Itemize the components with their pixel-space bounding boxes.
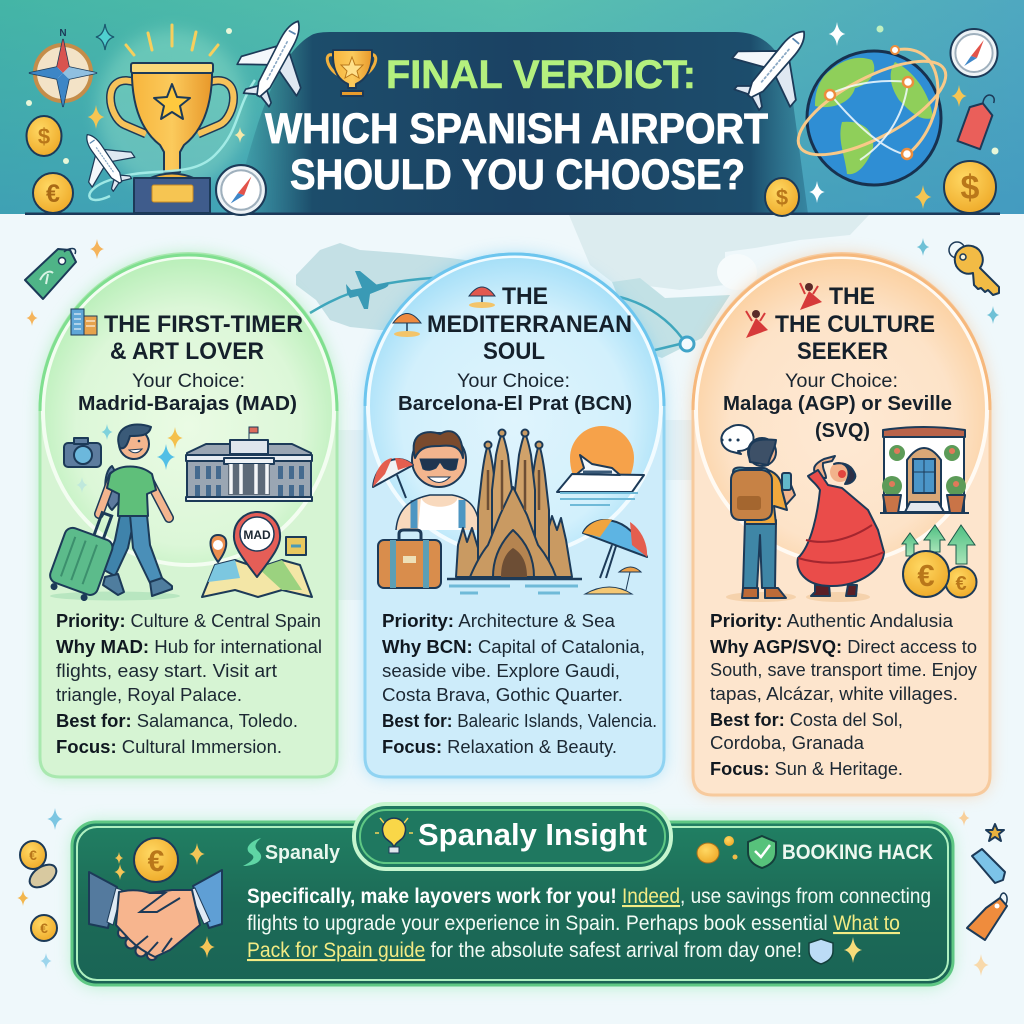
- airport choice: Malaga (AGP) or Seville: [723, 393, 952, 415]
- panel: culture seeker: [693, 253, 990, 795]
- logo: Spanaly: Spanaly: [265, 842, 341, 864]
- panel heading: & ART LOVER: [110, 338, 264, 365]
- icon: sparkles: [76, 424, 183, 493]
- panel heading: SEEKER: [797, 338, 888, 365]
- panel text: South, save transport time. Enjoy: [710, 659, 978, 680]
- icon: euro coin left: €: [46, 180, 60, 208]
- title icon: gold trophy: [327, 50, 376, 96]
- flight path with plane: [310, 271, 694, 351]
- panel: first-timer and art lover: [40, 253, 337, 777]
- icon: camera: [64, 438, 101, 467]
- icon: orange pin: [210, 535, 226, 562]
- panel heading: THE: [502, 283, 548, 310]
- panel text: Why BCN: Capital of Catalonia,: [382, 636, 645, 657]
- insight text: Specifically, make layovers work for you! Indeed, use savings from connecting: [247, 885, 931, 908]
- header sparkles: [26, 22, 998, 209]
- illustration: euro coin over handshake: [89, 838, 222, 960]
- airport choice: [398, 371, 632, 415]
- booking hack badge: BOOKING HACK: [782, 841, 933, 864]
- panel text: Focus: Cultural Immersion.: [56, 736, 282, 757]
- icon: dollar coin center: [765, 178, 799, 216]
- panel heading: SOUL: [483, 338, 545, 365]
- icon: golden key: [949, 242, 999, 295]
- panel text: Priority: Culture & Central Spain: [56, 610, 321, 631]
- illustration: backpacker: [726, 438, 796, 602]
- header band: [0, 0, 1024, 215]
- illustration: smiling traveler: [396, 431, 480, 530]
- icon: white Andalusian house: [880, 427, 969, 513]
- icon: MAD pin: [234, 512, 280, 577]
- panel text: Focus: Sun & Heritage.: [710, 758, 903, 779]
- panel text: Best for: Salamanca, Toledo.: [56, 710, 298, 731]
- icon: dollar coin center: $: [776, 185, 788, 210]
- icon: plane upper right: [718, 7, 833, 124]
- airport choice: Barcelona-El Prat (BCN): [398, 393, 632, 415]
- icon: buildings: [71, 309, 97, 335]
- panel heading: [104, 311, 303, 365]
- icon: euro coins: €: [917, 558, 935, 593]
- icon: green suitcase: [45, 503, 123, 604]
- icon: globe with routes: [786, 43, 958, 185]
- title banner: [232, 32, 808, 214]
- airport choice: Your Choice:: [785, 371, 898, 392]
- icon: small map card: [286, 537, 306, 555]
- icon: green growth arrows: [902, 525, 975, 564]
- icon: beach umbrella top: [469, 287, 495, 308]
- panel text: Why AGP/SVQ: Direct access to: [710, 636, 977, 657]
- icon: small umbrella: [373, 458, 413, 498]
- booking hack badge: [697, 836, 933, 868]
- panel text: [56, 610, 322, 757]
- illustration: flamenco dancer: [797, 456, 884, 602]
- page sparkles: [17, 238, 999, 976]
- insight text: Pack for Spain guide for the absolute safest arrival from day one!: [247, 939, 802, 962]
- illustration: Sagrada Familia: [447, 430, 582, 593]
- icon: euro coins: [903, 551, 976, 598]
- icon: map: [202, 560, 312, 597]
- trophy with rays: [97, 25, 247, 213]
- illustration: traveler walking: [50, 425, 180, 600]
- icon: compass right: [950, 29, 998, 77]
- icon: large beach umbrella: [583, 519, 647, 594]
- icon: sunset: [570, 426, 634, 487]
- icon: red price tag: [957, 90, 999, 149]
- panel text: seaside vibe. Explore Gaudi,: [382, 660, 620, 681]
- icon: coins left of insight: €: [40, 920, 48, 936]
- panel text: Best for: Costa del Sol,: [710, 709, 903, 730]
- panel heading: MEDITERRANEAN: [427, 311, 632, 338]
- flight trail: [89, 80, 255, 200]
- panel text: [382, 610, 657, 757]
- logo: Spanaly: [243, 838, 341, 866]
- airport choice: Your Choice:: [457, 371, 570, 392]
- insight text: flights to upgrade your experience in Spain. Perhaps book essential What to: [247, 912, 900, 935]
- icon: dancer emoji side: [746, 310, 768, 338]
- panel heading: THE FIRST-TIMER: [104, 311, 303, 338]
- icon: euro coins: €: [955, 573, 967, 595]
- title: SHOULD YOU CHOOSE?: [290, 151, 745, 199]
- icon: dollar coin small left: $: [38, 124, 50, 149]
- icon: dollar coin small left: [26, 116, 62, 156]
- icon: compass lower: [216, 165, 266, 215]
- icon: coins left of insight: [20, 841, 60, 941]
- insight heading pill: Spanaly Insight: [418, 817, 647, 852]
- panel heading: THE: [829, 283, 875, 310]
- panel text: Why MAD: Hub for international: [56, 636, 322, 657]
- airport choice: Madrid-Barajas (MAD): [78, 393, 297, 415]
- illustration: euro coin over handshake: €: [148, 845, 165, 878]
- icon: yacht: [557, 455, 644, 505]
- icon: plane lower left: [66, 120, 144, 200]
- panel: Spanaly insight: [72, 804, 953, 987]
- top left green tag: [25, 248, 76, 299]
- icon: light bulb: [375, 818, 413, 853]
- panel heading: [775, 283, 935, 365]
- airport choice: [723, 371, 952, 442]
- title: FINAL VERDICT:: [386, 53, 696, 97]
- airport choice: Your Choice:: [132, 371, 245, 392]
- panel: Mediterranean soul: [365, 254, 664, 777]
- panel text: Cordoba, Granada: [710, 732, 865, 753]
- icon: dollar coin right: [944, 161, 996, 213]
- panel text: Costa Brava, Gothic Quarter.: [382, 684, 623, 705]
- panel text: Focus: Relaxation & Beauty.: [382, 736, 617, 757]
- icon: plane upper left: [227, 5, 328, 116]
- panel text: Best for: Balearic Islands, Valencia.: [382, 710, 657, 731]
- icon: euro coin left: [33, 173, 73, 213]
- background map of Spain: [296, 215, 869, 600]
- icon: dollar coin right: $: [961, 169, 980, 207]
- icon: beach umbrella side: [393, 314, 421, 337]
- panel text: Priority: Authentic Andalusia: [710, 610, 954, 631]
- icon: MAD pin: MAD: [243, 528, 271, 542]
- airport choice: [78, 371, 297, 415]
- panel heading: THE CULTURE: [775, 311, 935, 338]
- icon: blue shield: [809, 939, 833, 964]
- insight text: [247, 885, 931, 964]
- panel text: Priority: Architecture & Sea: [382, 610, 616, 631]
- icon: tags right of insight: [967, 824, 1007, 940]
- icon: sparkle: [844, 937, 862, 963]
- icon: speech bubble: [721, 425, 754, 454]
- title: WHICH SPANISH AIRPORT: [265, 105, 768, 153]
- insight heading pill: [354, 804, 671, 869]
- icon: compass rose: [29, 28, 97, 107]
- panel text: triangle, Royal Palace.: [56, 684, 242, 705]
- panel text: flights, easy start. Visit art: [56, 660, 277, 681]
- panel text: [710, 610, 978, 779]
- icon: compass rose: N: [59, 28, 67, 39]
- airport choice: (SVQ): [815, 420, 870, 442]
- title: [265, 50, 768, 199]
- icon: dancer emoji top: [800, 283, 822, 310]
- panel text: tapas, Alcázar, white villages.: [710, 683, 958, 704]
- icon: museum building: [186, 427, 312, 501]
- panel heading: [427, 283, 632, 365]
- icon: coins left of insight: €: [29, 847, 37, 863]
- icon: brown suitcase: [378, 530, 441, 588]
